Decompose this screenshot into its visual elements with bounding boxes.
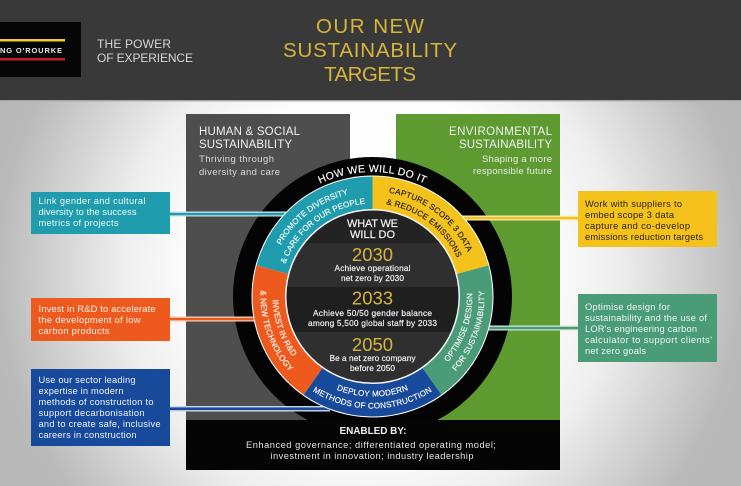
target 2033: 2033 xyxy=(352,288,393,308)
header band xyxy=(0,0,741,102)
enabled by band: investment in innovation; industry leadership xyxy=(270,451,474,461)
enabled by band: ENABLED BY: xyxy=(340,426,406,437)
callout: suppliers scope 3: emissions reduction targets xyxy=(585,232,703,242)
panel subheading: shaping xyxy=(473,154,552,177)
segment: promote diversity: PROMOTE DIVERSITY xyxy=(276,188,347,245)
title: OUR NEW xyxy=(316,15,425,38)
callout: modern methods of construction xyxy=(31,369,170,446)
heading: what we will do: WILL DO xyxy=(350,229,395,241)
callout: suppliers scope 3 xyxy=(578,191,717,247)
logo: NG O'ROURKE xyxy=(0,46,62,55)
segment: capture scope 3 xyxy=(372,176,488,274)
segment: promote diversity: & CARE FOR OUR PEOPLE xyxy=(280,198,365,264)
target 2030: net zero by 2030 xyxy=(341,273,404,283)
segment: invest in R&D: & NEW TECHNOLOGY xyxy=(260,290,294,370)
callout: modern methods of construction: Use our sector leading xyxy=(38,375,136,385)
heading: what we will do: WHAT WE xyxy=(347,218,398,230)
connector: yellow xyxy=(462,216,578,220)
segment: optimise design: FOR SUSTAINABILITY xyxy=(452,291,484,371)
tagline: THE POWER xyxy=(97,37,171,51)
callout: modern methods of construction: methods of construction to xyxy=(38,397,154,407)
panel: human and social sustainability xyxy=(186,114,350,420)
callout: suppliers scope 3: Work with suppliers to xyxy=(585,199,682,209)
callout: gender and cultural diversity: Link gender and cultural xyxy=(38,196,146,206)
panel heading: environmental: SUSTAINABILITY xyxy=(459,139,552,151)
callout: modern methods of construction: support decarbonisation xyxy=(38,408,144,418)
callout: invest in R&D: Invest in R&D to accelerate xyxy=(38,304,156,314)
panel subheading: shaping: Shaping a more xyxy=(482,154,552,165)
panel heading: environmental: ENVIRONMENTAL xyxy=(449,126,553,138)
how we will do it ring: HOW WE WILL DO IT xyxy=(318,164,428,184)
connector: blue xyxy=(170,406,330,412)
segment: capture scope 3: & REDUCE EMISSIONS xyxy=(386,199,462,258)
target 2030: 2030 xyxy=(352,244,393,265)
callout: modern methods of construction: careers in construction xyxy=(38,430,136,440)
callout: optimise design xyxy=(578,294,717,362)
callout: suppliers scope 3: embed scope 3 data xyxy=(585,210,675,220)
tagline xyxy=(97,37,193,65)
segment: deploy modern methods: METHODS OF CONSTRUCTION xyxy=(313,386,432,409)
panel subheading: shaping: responsible future xyxy=(473,166,552,177)
segment: deploy modern methods xyxy=(304,368,442,416)
what we will do core xyxy=(280,205,465,387)
connector: orange xyxy=(170,316,255,322)
logo xyxy=(0,22,81,77)
callout: gender and cultural diversity: metrics of projects xyxy=(38,218,119,228)
callout: modern methods of construction: and to create safe, inclusive xyxy=(38,419,160,429)
target 2030 xyxy=(334,244,411,283)
panel: environmental sustainability xyxy=(396,114,560,420)
title: SUSTAINABILITY xyxy=(283,39,457,62)
target 2050 xyxy=(330,334,416,373)
callout: gender and cultural diversity: diversity to the success xyxy=(38,207,137,217)
target 2050: 2050 xyxy=(352,334,393,355)
target 2050: Be a net zero company xyxy=(330,353,416,363)
enabled by band xyxy=(186,420,560,470)
connector: green xyxy=(488,326,578,330)
panel heading: human and social: SUSTAINABILITY xyxy=(199,139,292,151)
callout: optimise design: Optimise design for xyxy=(585,302,670,312)
heading: what we will do xyxy=(347,218,398,241)
panel subheading: thriving xyxy=(199,154,280,178)
target 2033 xyxy=(308,288,437,328)
ring of actions xyxy=(252,176,494,418)
how we will do it ring xyxy=(233,157,512,420)
tagline: OF EXPERIENCE xyxy=(97,51,193,65)
panel subheading: thriving: Thriving through xyxy=(199,154,274,165)
panel heading: environmental xyxy=(449,126,553,151)
callout: invest in R&D xyxy=(31,298,170,341)
callout: optimise design: net zero goals xyxy=(585,346,646,356)
target 2033: Achieve 50/50 gender balance xyxy=(313,308,432,318)
segment: optimise design xyxy=(422,265,492,395)
target 2030: Achieve operational xyxy=(334,263,411,273)
callout: optimise design: calculator to support clients' xyxy=(585,335,712,345)
segment: optimise design: OPTIMISE DESIGN xyxy=(444,294,472,361)
callout: suppliers scope 3: capture and co-develop xyxy=(585,221,690,231)
segment: invest in R&D: INVEST IN R&D xyxy=(272,300,296,356)
callout: modern methods of construction: expertise in modern xyxy=(38,386,124,396)
title: TARGETS xyxy=(324,63,416,86)
segment: deploy modern methods: DEPLOY MODERN xyxy=(337,384,408,397)
callout: optimise design: LOR's engineering carbon xyxy=(585,324,697,334)
callout: optimise design: sustainability and the use of xyxy=(585,313,707,323)
enabled by band: Enhanced governance; differentiated operating model; xyxy=(246,440,496,450)
callout: gender and cultural diversity xyxy=(31,192,170,234)
target 2033: among 5,500 global staff by 2033 xyxy=(308,318,437,328)
segment: promote diversity xyxy=(256,176,372,274)
panel heading: human and social: HUMAN & SOCIAL xyxy=(199,126,301,138)
page background xyxy=(0,100,741,486)
callout: invest in R&D: carbon products xyxy=(38,326,110,336)
panel heading: human and social xyxy=(199,126,301,151)
segment: capture scope 3: CAPTURE SCOPE 3 DATA xyxy=(390,188,472,252)
segment: invest in R&D xyxy=(252,265,322,395)
connector: teal xyxy=(170,212,286,216)
callout: invest in R&D: the development of low xyxy=(38,315,141,325)
title xyxy=(283,15,457,86)
panel subheading: thriving: diversity and care xyxy=(199,167,280,178)
target 2050: before 2050 xyxy=(350,363,395,373)
